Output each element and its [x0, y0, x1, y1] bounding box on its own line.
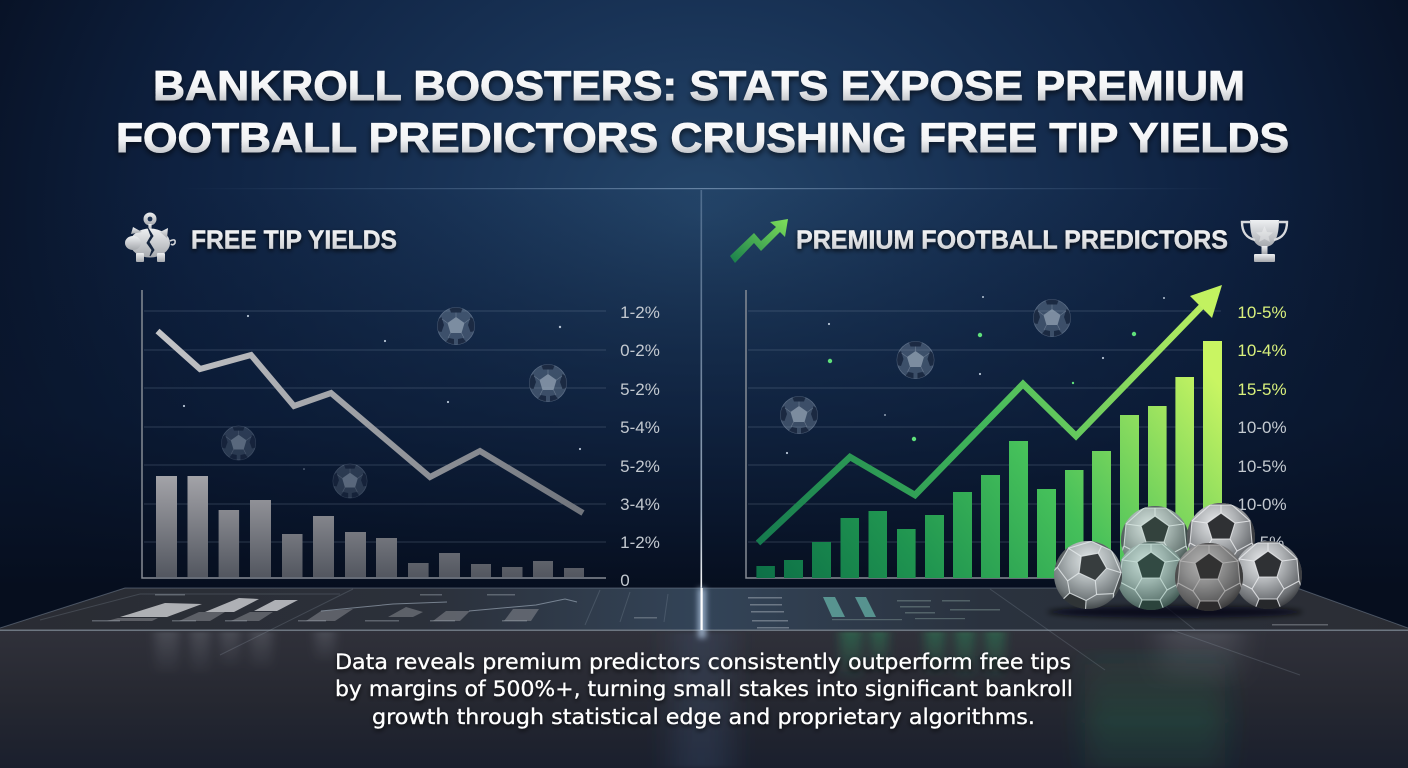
- floor grid lines: [40, 589, 1300, 675]
- body text: by margins of 500%+, turning small stakes into significant bankroll: [335, 677, 1073, 701]
- axis labels: [1237, 303, 1287, 552]
- axis labels: 5-2%: [620, 380, 660, 399]
- floor mini charts: left: [92, 594, 657, 622]
- body text: [335, 650, 1073, 729]
- icon: broken piggy bank: [125, 212, 175, 262]
- metallic footballs: [1038, 499, 1304, 628]
- floor mini charts: right: [748, 597, 1328, 628]
- body text: growth through statistical edge and proprietary algorithms.: [372, 705, 1035, 729]
- axis labels: 0: [620, 571, 630, 590]
- bars: [756, 341, 1222, 578]
- panel: premium football predictors: [730, 219, 1287, 578]
- axis labels: 0-2%: [620, 341, 660, 360]
- chart: premium predictors: [746, 285, 1287, 578]
- icons: faint footballs: [221, 307, 567, 498]
- center light on floor: [698, 588, 706, 638]
- center divider: [700, 190, 702, 590]
- chart: free tip yields: [142, 290, 660, 590]
- axis labels: 10-0%: [1237, 418, 1287, 437]
- heading: free tip yields: FREE TIP YIELDS: [191, 224, 397, 254]
- trend arrow: rising: [758, 285, 1222, 543]
- icons: faint footballs: [780, 299, 1071, 434]
- axis labels: 10-0%: [1237, 495, 1287, 514]
- stars and green dots: [786, 296, 1165, 454]
- heading: premium football predictors: PREMIUM FOOTBALL PREDICTORS: [796, 224, 1228, 254]
- floor panel: [0, 588, 1408, 768]
- title: [116, 62, 1289, 161]
- axis labels: 1-2%: [620, 303, 660, 322]
- axis labels: 5-2%: [620, 457, 660, 476]
- axis labels: [620, 303, 660, 590]
- reflections: [155, 632, 1240, 768]
- axis labels: 3-4%: [620, 495, 660, 514]
- axis labels: 10-5%: [1237, 457, 1287, 476]
- bars: [156, 476, 584, 577]
- title: BANKROLL BOOSTERS: STATS EXPOSE PREMIUM: [153, 62, 1245, 109]
- ball shadows: [1047, 606, 1303, 618]
- axis labels: 10-4%: [1237, 341, 1287, 360]
- axis labels: 5-4%: [620, 418, 660, 437]
- axis labels: 10-5%: [1237, 303, 1287, 322]
- icon: rising arrow: [730, 219, 788, 263]
- axis labels: 1-2%: [620, 533, 660, 552]
- trend line: falling: [158, 331, 583, 513]
- axis labels: 15-5%: [1237, 380, 1287, 399]
- body text: Data reveals premium predictors consistently outperform free tips: [335, 650, 1071, 674]
- icon: trophy: [1242, 220, 1287, 262]
- stars: [183, 315, 581, 470]
- panel: free tip yields: [125, 212, 660, 590]
- title: FOOTBALL PREDICTORS CRUSHING FREE TIP YIELDS: [116, 114, 1289, 161]
- axis labels: 5%: [1260, 533, 1284, 552]
